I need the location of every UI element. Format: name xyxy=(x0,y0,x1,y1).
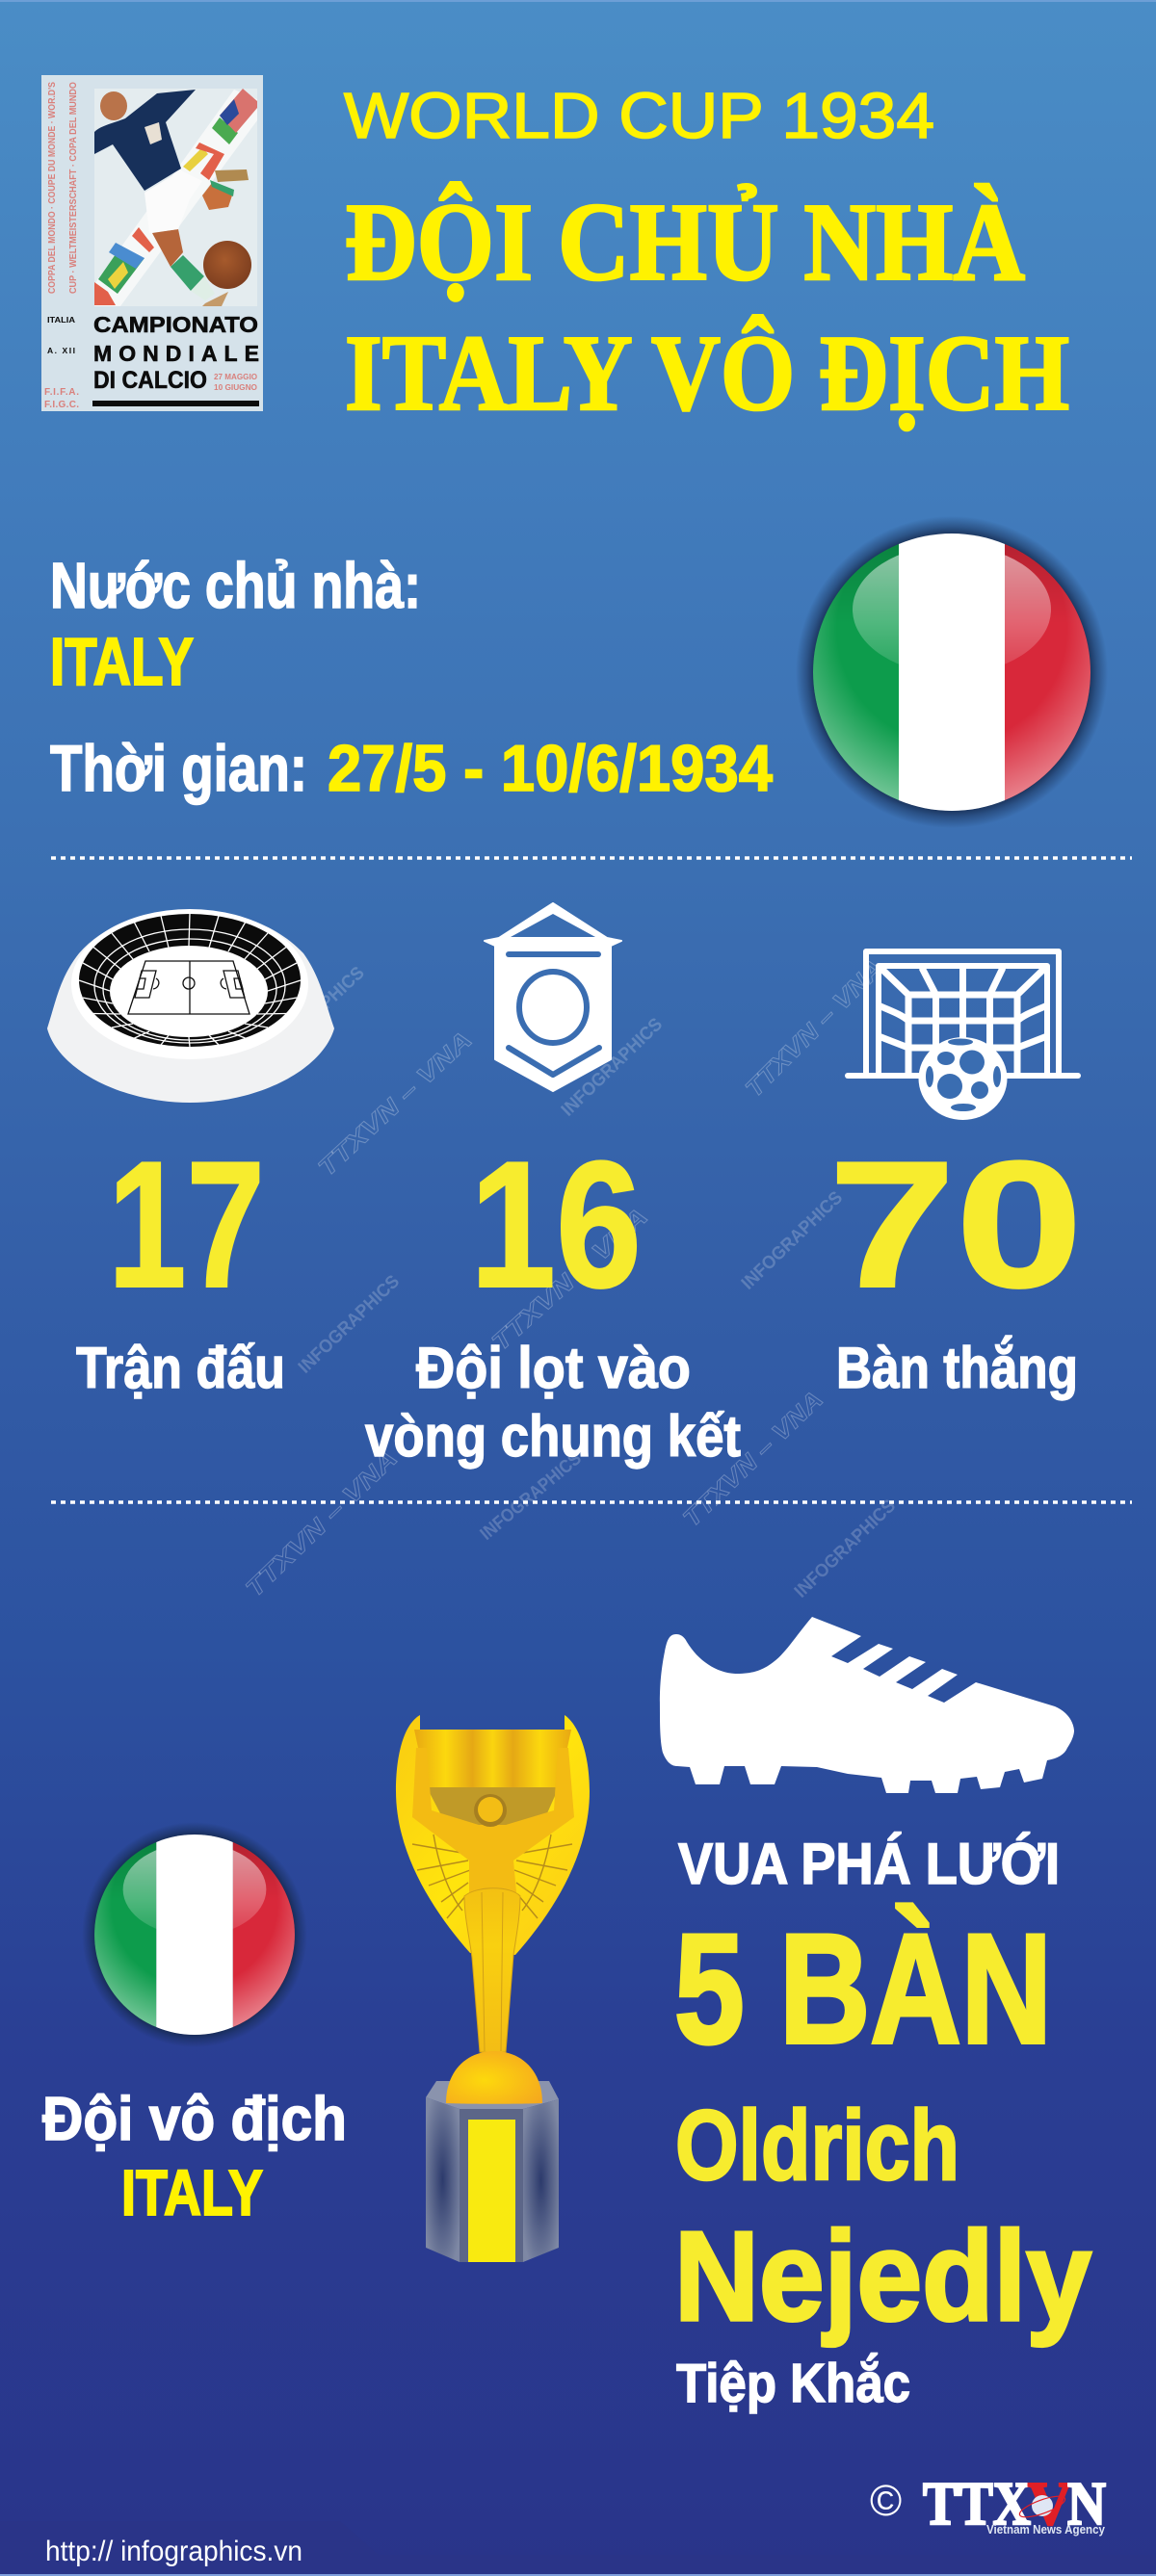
time value: 27/5 - 10/6/1934 xyxy=(328,732,773,805)
stat label teams: vòng chung kết xyxy=(365,1404,741,1469)
time label: Thời gian: xyxy=(50,732,307,805)
logo: TTXVN: TTX xyxy=(923,2469,1031,2537)
poster title text: CAMPIONATO xyxy=(93,312,258,337)
icon: Italy flag large xyxy=(796,516,1108,828)
icon: goal with ball xyxy=(848,951,1078,1120)
watermarks: INFOGRAPHICS xyxy=(477,1448,586,1545)
stat label teams: Đội lọt vào xyxy=(416,1336,691,1400)
poster dates xyxy=(44,373,257,410)
poster flag strip xyxy=(94,89,257,306)
scorer country: Tiệp Khắc xyxy=(676,2352,910,2414)
footer band xyxy=(0,2521,1156,2576)
icon: football boot xyxy=(660,1617,1074,1793)
stat number 16: 16 xyxy=(470,1124,642,1325)
poster black bar xyxy=(92,401,259,406)
host label: Nước chủ nhà: xyxy=(50,550,421,622)
trophy wings xyxy=(396,1715,590,1955)
scorer first name: Oldrich xyxy=(675,2090,959,2200)
poster dates: F.I.G.C. xyxy=(44,400,79,410)
poster dates: F.I.F.A. xyxy=(44,387,79,398)
title: line 3: ITALY VÔ ĐỊCH xyxy=(345,314,1069,433)
host value: ITALY xyxy=(50,624,194,699)
scorer goals: 5 BÀN xyxy=(674,1902,1052,2076)
title: world cup 1934: WORLD CUP 1934 xyxy=(344,80,934,152)
champion label: Đội vô địch xyxy=(42,2084,347,2153)
trophy base xyxy=(426,2081,559,2262)
logo: TTXVN: N xyxy=(1067,2469,1106,2537)
logo: TTXVN xyxy=(923,2469,1106,2537)
poster side text: COPPA DEL MONDO · COUPE DU MONDE · WOR.D'S xyxy=(46,82,58,294)
scorer label: VUA PHÁ LƯỚI xyxy=(678,1832,1060,1896)
scorer last name: Nejedly xyxy=(674,2205,1091,2347)
poster dates: 27 MAGGIO xyxy=(214,373,257,381)
watermarks: INFOGRAPHICS xyxy=(295,1271,404,1378)
watermarks xyxy=(241,954,900,1602)
poster title text: MONDIALE xyxy=(93,341,259,366)
watermarks: INFOGRAPHICS xyxy=(558,1014,667,1121)
watermarks: TTXVN – VNA xyxy=(486,1203,653,1356)
icon: Jules Rimet trophy xyxy=(396,1715,590,2262)
poster title text: A. XII xyxy=(47,346,75,355)
watermarks: TTXVN – VNA xyxy=(740,954,889,1103)
watermarks: INFOGRAPHICS xyxy=(258,963,369,1068)
poster ball xyxy=(203,241,251,289)
stat label teams xyxy=(365,1336,741,1469)
watermarks: INFOGRAPHICS xyxy=(791,1496,900,1602)
title: line 2: ĐỘI CHỦ NHÀ xyxy=(345,181,1025,304)
poster title text xyxy=(47,312,259,394)
icon: pennant xyxy=(485,903,621,1091)
poster side text xyxy=(46,82,79,294)
champion label xyxy=(42,2084,347,2229)
watermarks: INFOGRAPHICS xyxy=(738,1187,847,1294)
poster title text: ITALIA xyxy=(47,315,75,325)
watermarks: TTXVN – VNA xyxy=(678,1386,828,1532)
host info xyxy=(50,550,773,805)
stat number 70: 70 xyxy=(828,1124,1083,1325)
icon: stadium xyxy=(47,909,334,1103)
stadium pitch xyxy=(128,961,250,1014)
stat label goals: Bàn thắng xyxy=(836,1336,1078,1400)
watermarks: TTXVN – VNA xyxy=(241,1444,403,1602)
copyright symbol: © xyxy=(870,2476,902,2525)
panel: poster 1934 xyxy=(41,75,263,411)
watermarks: TTXVN – VNA xyxy=(313,1027,477,1182)
poster title text: DI CALCIO xyxy=(93,367,207,394)
trophy feathers xyxy=(412,1834,572,1918)
stats xyxy=(76,1124,1083,1469)
logo: TTXVN: V xyxy=(1028,2469,1072,2537)
trophy cup xyxy=(414,1730,571,1788)
icon: Italy flag small xyxy=(82,1822,307,2047)
trophy dome xyxy=(446,2051,542,2104)
poster side text: CUP · WELTMEISTERSCHAFT · COPA DEL MUNDO xyxy=(67,82,79,294)
stat number 17: 17 xyxy=(108,1124,265,1325)
champion name: ITALY xyxy=(121,2157,263,2229)
poster player xyxy=(94,90,249,306)
scorer block xyxy=(674,1832,1091,2414)
poster dates: 10 GIUGNO xyxy=(214,383,257,392)
title block xyxy=(344,80,1069,433)
footer url: http:// infographics.vn xyxy=(45,2536,302,2567)
trophy figure xyxy=(412,1748,574,2052)
stat label matches: Trận đấu xyxy=(76,1336,285,1400)
logo: TTXVN: Vietnam News Agency xyxy=(986,2523,1105,2537)
